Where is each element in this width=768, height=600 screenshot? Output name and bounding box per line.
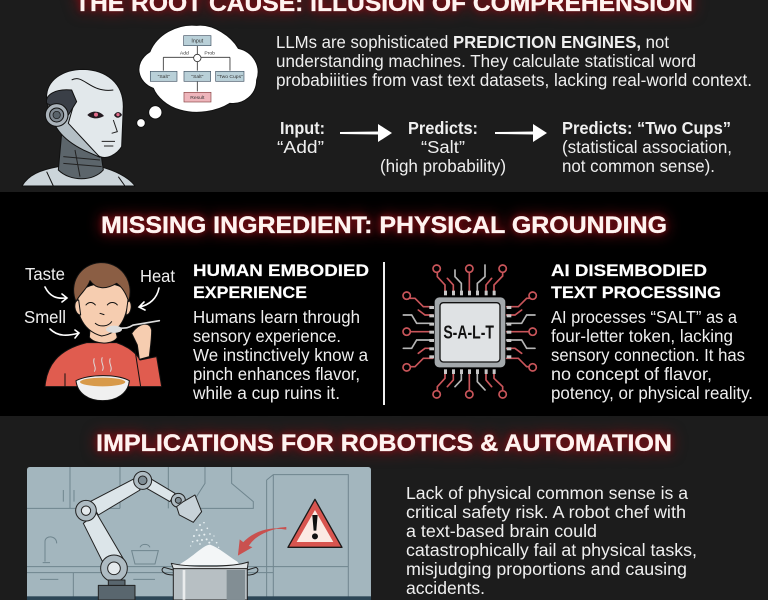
- icon: thought cloud: [137, 25, 258, 127]
- text block: human embodied: EXPERIENCE: [193, 283, 307, 302]
- text block: ai disembodied: no concept of flavor,: [551, 364, 712, 384]
- text block: safety risk: [406, 483, 697, 598]
- icon: thought cloud: "Salt": [158, 74, 170, 80]
- text block: human embodied: We instinctively know a: [193, 345, 368, 365]
- icon: thought cloud: Add: [180, 51, 189, 57]
- text block: ai disembodied: AI processes “SALT” as a: [551, 307, 737, 327]
- text block: safety risk: catastrophically fail at physical tasks,: [406, 540, 697, 560]
- icon: thought cloud: Input: [191, 39, 204, 45]
- flow: salt step: Predicts:: [408, 118, 478, 138]
- flow: two cups step: Predicts: “Two Cups”: [562, 118, 731, 138]
- callout: sense labels: Smell: [24, 307, 66, 327]
- icon: person tasting soup: [45, 263, 162, 401]
- flow: input step: [277, 118, 325, 157]
- flow: salt step: “Salt”: [421, 137, 465, 157]
- text block: prediction engines: [276, 32, 752, 90]
- arrow: input to salt: [340, 124, 392, 142]
- text block: ai disembodied: sensory connection. It has: [551, 345, 745, 365]
- text block: prediction engines: understanding machines. They calculate statistical word: [276, 51, 696, 71]
- callout: sense labels: Taste: [25, 264, 65, 284]
- text block: safety risk: accidents.: [406, 578, 485, 598]
- text block: human embodied: pinch enhances flavor,: [193, 364, 360, 384]
- icon: thought cloud: Prob: [204, 51, 215, 57]
- panel: physical grounding: [0, 192, 768, 416]
- panel: implications: [0, 416, 768, 600]
- text block: ai disembodied: [551, 261, 753, 403]
- icon: salt chip: [403, 265, 536, 398]
- text block: human embodied: while a cup ruins it.: [192, 383, 340, 403]
- text block: human embodied: [192, 261, 369, 403]
- text block: safety risk: critical safety risk. A robot chef with: [406, 502, 686, 522]
- heading: implications: IMPLICATIONS FOR ROBOTICS & AUTOMATION: [96, 430, 672, 457]
- icon: thought cloud: "Two Cups": [217, 74, 243, 80]
- flow: two cups step: [562, 118, 732, 176]
- text block: prediction engines: LLMs are sophisticated PREDICTION ENGINES, not: [276, 32, 669, 52]
- text block: safety risk: a text-based brain could: [406, 521, 597, 541]
- callout: sense labels: Heat: [140, 266, 175, 286]
- text block: ai disembodied: potency, or physical reality.: [551, 383, 753, 403]
- icon: salt chip: S-A-L-T: [443, 321, 494, 342]
- flow: input step: “Add”: [277, 137, 324, 157]
- text block: ai disembodied: TEXT PROCESSING: [551, 283, 721, 302]
- flow: salt step: [380, 118, 506, 176]
- text block: human embodied: HUMAN EMBODIED: [193, 261, 369, 280]
- text block: safety risk: Lack of physical common sense is a: [406, 483, 688, 503]
- icon: thought cloud: "Salt": [191, 74, 204, 80]
- heading: missing ingredient: MISSING INGREDIENT: PHYSICAL GROUNDING: [101, 212, 667, 239]
- flow: input step: Input:: [280, 118, 325, 138]
- flow: two cups step: not common sense).: [562, 156, 715, 176]
- panel: root cause: [0, 0, 768, 192]
- illustration: robot kitchen: [27, 467, 371, 600]
- icon: warning triangle: [288, 499, 342, 547]
- callout: sense labels: [24, 264, 175, 338]
- arrow: salt to two cups: [495, 124, 547, 142]
- icon: robot head: [22, 69, 135, 186]
- text block: ai disembodied: four-letter token, lacking: [551, 326, 733, 346]
- text block: prediction engines: probabiiities from vast text datasets, lacking real-world context.: [276, 70, 752, 90]
- flow: two cups step: (statistical association,: [562, 137, 732, 157]
- text block: human embodied: Humans learn through: [193, 307, 360, 327]
- icon: thought cloud: Result: [190, 95, 205, 101]
- text block: human embodied: sensory experience.: [193, 326, 341, 346]
- text block: ai disembodied: AI DISEMBODIED: [551, 261, 707, 280]
- flow: salt step: (high probability): [380, 156, 506, 176]
- text block: safety risk: misjudging proportions and causing: [406, 559, 687, 579]
